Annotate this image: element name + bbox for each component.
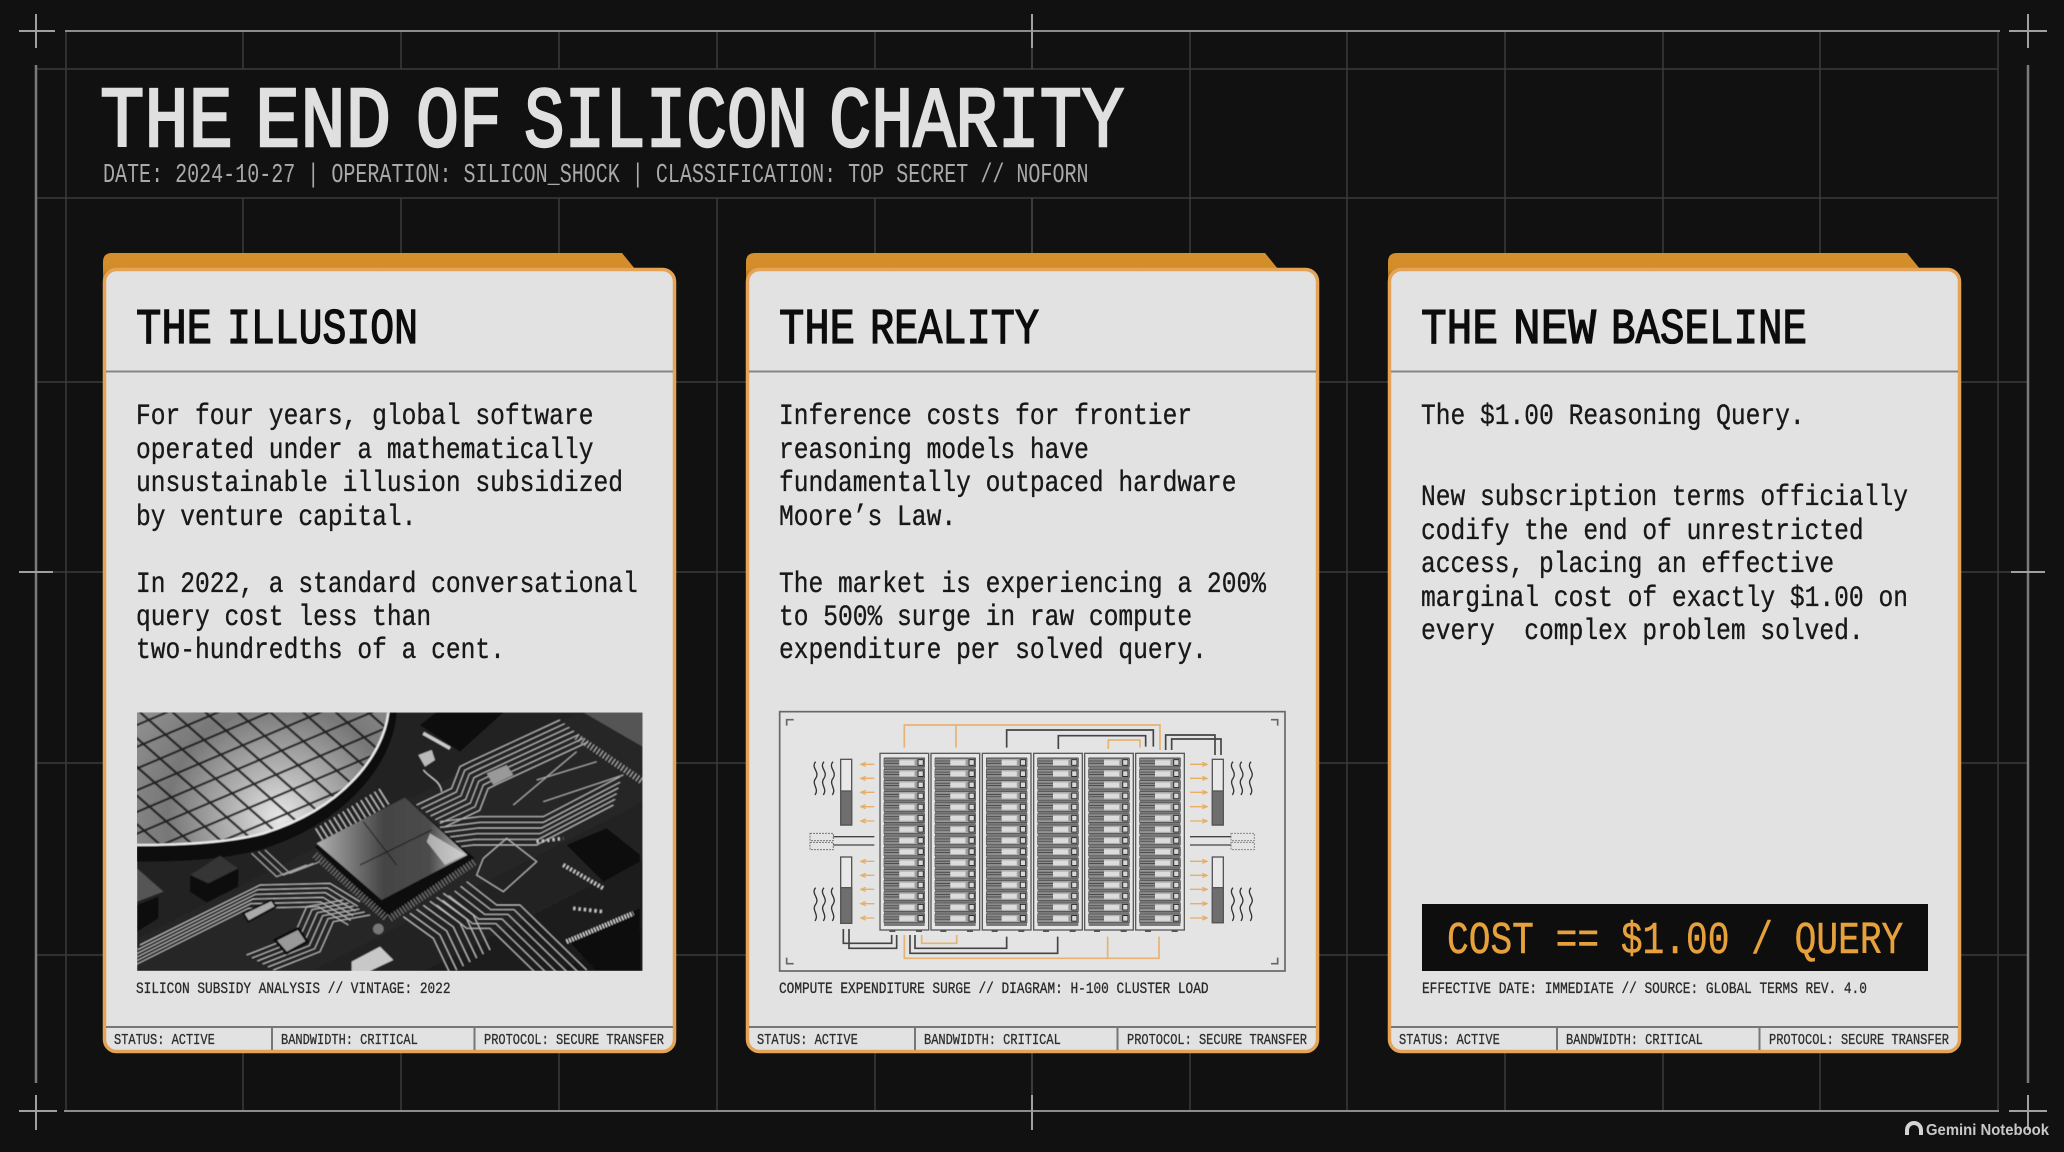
panel: the new baseline [1388, 253, 1960, 1052]
title: END [255, 74, 391, 172]
heading: BASELINE [1611, 302, 1807, 359]
callout caption: EFFECTIVE DATE: IMMEDIATE // SOURCE: GLOBAL TERMS REV. 4.0 [1422, 981, 1867, 999]
body text [779, 400, 1266, 668]
heading [779, 302, 1039, 359]
footer status bar: BANDWIDTH: CRITICAL [1566, 1033, 1703, 1050]
dark shadow under wafer [137, 712, 397, 862]
diagram: H-100 server cluster [780, 712, 1285, 971]
body text: access, placing an effective [1421, 548, 1834, 582]
body text: reasoning models have [779, 434, 1089, 468]
body text: Inference costs for frontier [779, 400, 1192, 434]
footer status bar: PROTOCOL: SECURE TRANSFER [1769, 1033, 1949, 1050]
small components [243, 900, 276, 922]
body text: In 2022, a standard conversational [136, 568, 638, 602]
title [100, 74, 1124, 172]
body text: marginal cost of exactly $1.00 on [1421, 582, 1908, 616]
body text: Moore’s Law. [779, 501, 956, 535]
heading: THE [1421, 302, 1498, 359]
body text: The market is experiencing a 200% [779, 568, 1266, 602]
dark ICs [420, 712, 503, 752]
heading: REALITY [870, 302, 1039, 359]
panel: the illusion [103, 253, 674, 1052]
footer status bar [757, 1033, 1307, 1050]
footer status bar: BANDWIDTH: CRITICAL [924, 1033, 1061, 1050]
wafer [137, 712, 388, 845]
card body [104, 270, 674, 1052]
body text: query cost less than [136, 601, 431, 635]
body text: to 500% surge in raw compute [779, 601, 1192, 635]
callout: cost per query [1422, 904, 1928, 971]
panel: the reality [746, 253, 1318, 1052]
folder tab [746, 253, 1283, 280]
data connectors [810, 833, 1254, 850]
footer status bar [114, 1033, 664, 1050]
folder tab [103, 253, 640, 280]
footer status bar: BANDWIDTH: CRITICAL [281, 1033, 418, 1050]
footer status bar: PROTOCOL: SECURE TRANSFER [484, 1033, 664, 1050]
footer status bar: STATUS: ACTIVE [1399, 1033, 1500, 1050]
title: THE [100, 74, 233, 172]
footer status bar: STATUS: ACTIVE [114, 1033, 215, 1050]
heading: THE [779, 302, 855, 359]
server racks [880, 753, 1184, 932]
body text: unsustainable illusion subsidized [136, 467, 623, 501]
heading: NEW [1513, 302, 1596, 359]
heading: ILLUSION [227, 302, 418, 359]
body text: fundamentally outpaced hardware [779, 467, 1236, 501]
body text: The $1.00 Reasoning Query. [1421, 400, 1805, 434]
body text: two-hundredths of a cent. [136, 634, 505, 668]
body text: For four years, global software [136, 400, 593, 434]
body text [136, 400, 638, 668]
black cube component [190, 868, 238, 902]
card body [1390, 270, 1960, 1052]
heading [136, 302, 418, 359]
body text: operated under a mathematically [136, 434, 593, 468]
photo: silicon wafer and chip on circuit board [128, 712, 643, 993]
body text: every complex problem solved. [1421, 615, 1864, 649]
subtitle metadata line: DATE: 2024-10-27 | OPERATION: SILICON_SHOCK | CLASSIFICATION: TOP SECRET // NOFORN [103, 160, 1089, 191]
card body [748, 270, 1318, 1052]
chip package [316, 812, 474, 918]
diagram caption: COMPUTE EXPENDITURE SURGE // DIAGRAM: H-100 CLUSTER LOAD [779, 981, 1209, 999]
footer status bar: PROTOCOL: SECURE TRANSFER [1127, 1033, 1307, 1050]
body text: codify the end of unrestricted [1421, 515, 1864, 549]
callout: cost per query: COST == $1.00 / QUERY [1447, 917, 1903, 967]
title: CHARITY [829, 74, 1124, 172]
coolant pipes [843, 725, 1221, 958]
image caption: SILICON SUBSIDY ANALYSIS // VINTAGE: 2022 [136, 981, 451, 999]
watermark: Gemini Notebook: Gemini Notebook [1926, 1122, 2049, 1139]
heat gauges [841, 759, 1223, 923]
title: SILICON [524, 74, 808, 172]
airflow arrows [861, 762, 1207, 920]
folder tab [1388, 253, 1925, 280]
body text [1421, 400, 1908, 649]
heat waves [814, 762, 1252, 921]
body text: by venture capital. [136, 501, 416, 535]
heading [1421, 302, 1807, 359]
body text: expenditure per solved query. [779, 634, 1207, 668]
body text: New subscription terms officially [1421, 481, 1908, 515]
footer status bar [1399, 1033, 1949, 1050]
title: OF [416, 74, 502, 172]
footer status bar: STATUS: ACTIVE [757, 1033, 858, 1050]
heading: THE [136, 302, 212, 359]
